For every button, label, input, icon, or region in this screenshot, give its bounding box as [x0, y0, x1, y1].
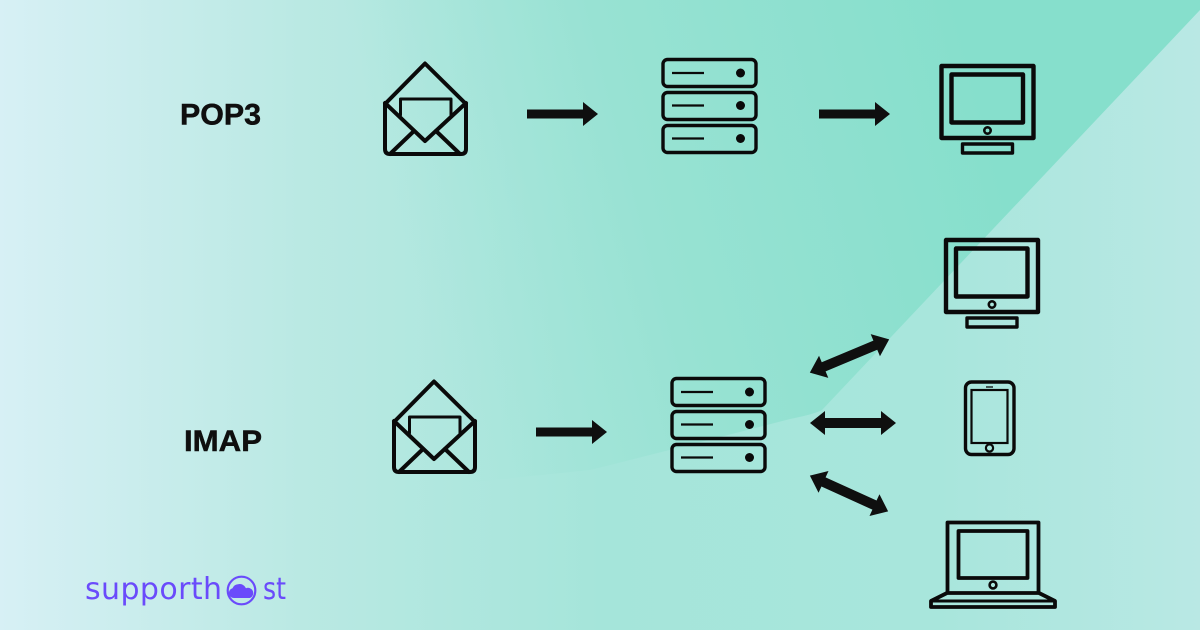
double arrow: server to tablet: [810, 411, 896, 435]
icon: POP3 open envelope: [385, 64, 466, 154]
arrow: POP3 envelope to server: [527, 102, 598, 126]
arrow: POP3 server to computer: [819, 102, 890, 126]
logo: supporthost: supporth: [85, 572, 222, 607]
logo: supporthost: st: [263, 572, 286, 607]
icon: POP3 desktop monitor: [942, 66, 1034, 153]
logo: supporthost: [85, 572, 286, 607]
label: POP3: POP3: [180, 98, 261, 132]
label: IMAP: IMAP: [184, 425, 262, 458]
icon: IMAP open envelope: [394, 382, 475, 472]
double arrow: server to desktop: [805, 328, 894, 384]
arrow: IMAP envelope to server: [536, 420, 607, 444]
icon: IMAP server stack: [672, 378, 765, 472]
icon: laptop: [931, 522, 1055, 607]
icon: POP3 server stack: [663, 60, 756, 152]
icon: tablet: [966, 382, 1014, 454]
double arrow: server to laptop: [805, 465, 893, 522]
icon: IMAP desktop monitor: [946, 240, 1038, 327]
